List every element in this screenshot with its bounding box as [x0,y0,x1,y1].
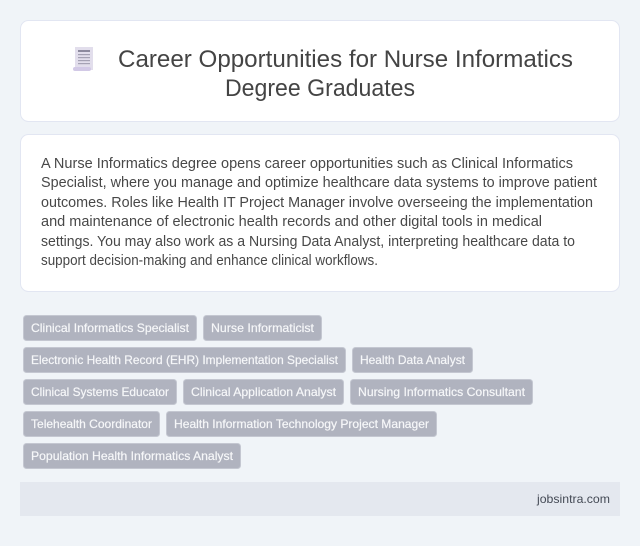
text block: description: A Nurse Informatics degree opens career opportunities such as Clinical Informatics [41,156,573,172]
text block: description: Specialist, where you manage and optimize healthcare data systems to improve patient [41,175,597,191]
tag: Health Data Analyst [360,353,466,367]
footer [20,482,620,516]
tag [352,348,472,372]
tag: Telehealth Coordinator [31,417,152,431]
text block: description: and maintenance of electronic health records and other digital tools in medical [41,214,542,230]
tag [24,412,160,436]
tag: Electronic Health Record (EHR) Implementation Specialist [31,353,339,367]
title [118,46,573,102]
tags: job titles [24,316,532,468]
text block: description [41,156,597,269]
text block: description: settings. You may also work as a Nursing Data Analyst, interpreting healthcare data to [41,234,575,250]
icon: document scroll [73,47,93,71]
title: Degree Graduates [225,75,415,102]
tag [24,380,176,404]
tag [24,316,196,340]
tag: Population Health Informatics Analyst [31,449,234,463]
tag [184,380,344,404]
tag [350,380,532,404]
footer source text: jobsintra.com [536,492,610,506]
title: Career Opportunities for Nurse Informatics [118,46,573,73]
tag: Clinical Informatics Specialist [31,321,190,335]
text block: description: support decision-making and enhance clinical workflows. [41,253,378,269]
tag: Clinical Systems Educator [31,385,169,399]
tag: Health Information Technology Project Manager [174,417,429,431]
tag [166,412,436,436]
tag [204,316,322,340]
tag: Nursing Informatics Consultant [358,385,526,399]
tag [24,444,240,468]
tag: Clinical Application Analyst [191,385,337,399]
panel: title card [20,20,620,122]
tag [24,348,346,372]
text block: description: outcomes. Roles like Health IT Project Manager involve overseeing the implementation [41,195,593,211]
tag: Nurse Informaticist [211,321,315,335]
panel: description [20,134,620,292]
